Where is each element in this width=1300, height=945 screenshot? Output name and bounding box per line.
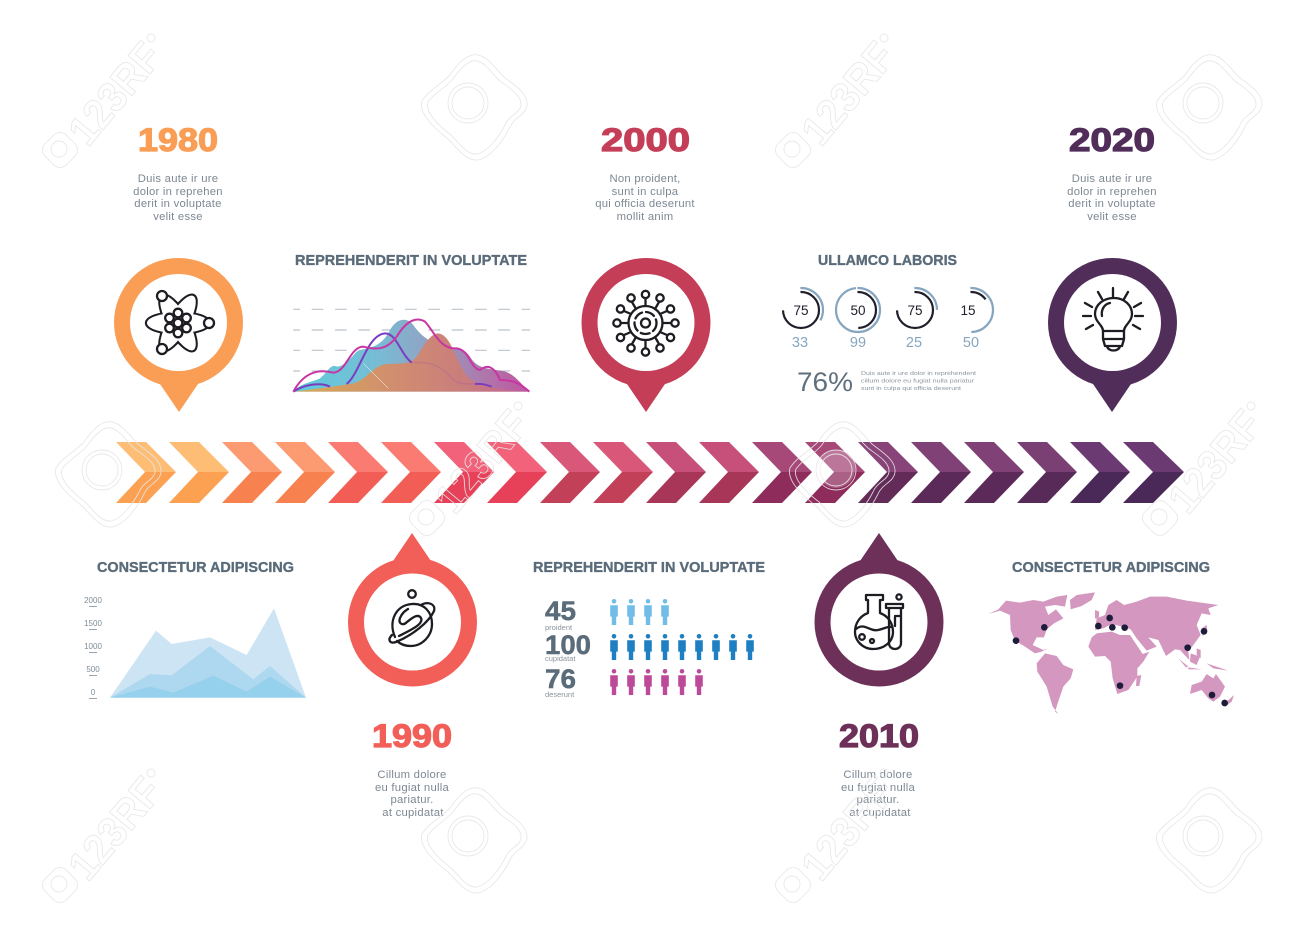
map pin 2000 with virus icon [582,258,710,412]
year 1980 heading: 1980 [138,122,218,158]
watermark 123RF marks: 123RF [1159,401,1271,522]
progress ring 15 / 50: 50 [963,335,979,351]
y axis labels [84,596,102,698]
text block 2000 [595,173,695,223]
text block 2010: Cillum dolore [843,769,913,781]
progress ring 75 / 25: 25 [906,335,922,351]
y axis labels: 500 [86,665,100,674]
people stat 76 deserunt: 76 [545,664,576,694]
progress ring 75 / 25: 75 [907,303,923,318]
progress ring 75 / 25 [893,288,937,351]
watermark 123RF marks: 123RF [426,401,538,522]
layered area and line chart [293,309,530,392]
stat description: sunt in culpa qui officia deserunt [861,386,961,392]
progress ring 75 / 33 [779,288,823,351]
chevron timeline arrow [116,442,1184,503]
watermark 123RF marks: 123RF [59,33,171,154]
text block 1990 [375,769,450,819]
year 2010 heading: 2010 [839,718,919,754]
text block 2020: velit esse [1087,211,1137,223]
text block 2000: Non proident, [609,173,681,185]
y axis labels: 2000 [84,596,102,605]
progress ring 15 / 50 [949,288,993,351]
people stat 100 cupidatat [545,630,754,663]
heading: reprehenderit top: REPREHENDERIT IN VOLUPTATE [295,253,527,269]
people stat 45 proident: 45 [545,596,576,626]
map pin 1980 with atom icon [114,258,243,412]
text block 2000: sunt in culpa [612,186,679,198]
stat 76 percent: 76% [797,367,853,397]
y axis labels: 0 [91,688,96,697]
people stat 76 deserunt [545,664,703,699]
map pin 2010 with chemistry flask icon [814,533,944,686]
text block 2010: pariatur. [856,794,900,806]
text block 1990: Cillum dolore [377,769,447,781]
y axis labels: 1000 [84,642,102,651]
world map with city dots [988,592,1234,714]
people stat 76 deserunt: deserunt [545,690,575,699]
text block 2020: dolor in reprehen [1067,186,1157,198]
people stat 100 cupidatat: 100 [545,630,591,660]
heading: consectetur right: CONSECTETUR ADIPISCING [1012,560,1210,576]
text block 1990: eu fugiat nulla [375,782,450,794]
text block 2010 [841,769,916,819]
map pin 1990 with planet icon [348,533,477,686]
people stat 45 proident [545,596,669,632]
text block 1980: dolor in reprehen [133,186,223,198]
watermark 123RF marks: 123RF [792,33,904,154]
text block 1980: derit in voluptate [134,198,222,210]
text block 1990: pariatur. [390,794,434,806]
map pin 2020 with light bulb icon [1048,258,1177,412]
text block 1990: at cupidatat [382,807,444,819]
text block 2010: eu fugiat nulla [841,782,916,794]
watermark highlight disc [817,450,855,488]
stat description: Duis aute ir ure dolor in reprehendent [861,371,976,377]
progress ring 15 / 50: 15 [960,303,976,318]
y axis labels: 1500 [84,619,102,628]
text block 2000: mollit anim [617,211,673,223]
heading: consectetur left: CONSECTETUR ADIPISCING [97,560,294,576]
stat description: cillum dolore eu fugiat nulla pariatur [861,378,974,384]
progress ring 50 / 99: 99 [850,335,866,351]
stat description [861,371,976,392]
text block 1980: Duis aute ir ure [138,173,218,185]
year 1990 heading: 1990 [372,718,452,754]
heading: reprehenderit bottom: REPREHENDERIT IN VOLUPTATE [533,560,765,576]
text block 2010: at cupidatat [849,807,911,819]
text block 1980 [133,173,223,223]
text block 2020 [1067,173,1157,223]
year 2000 heading: 2000 [601,122,690,158]
progress ring 75 / 33: 33 [792,335,808,351]
people stat 45 proident: proident [545,623,573,632]
blue layered area chart [110,608,306,698]
progress ring 75 / 33: 75 [793,303,809,318]
text block 2000: qui officia deserunt [595,198,695,210]
people stat 100 cupidatat: cupidatat [545,654,576,663]
progress ring 50 / 99 [836,288,880,351]
watermark 123RF marks: 123RF [59,768,171,889]
text block 2020: derit in voluptate [1068,198,1156,210]
text block 2020: Duis aute ir ure [1072,173,1152,185]
heading: ullamco laboris: ULLAMCO LABORIS [818,253,957,269]
year 2020 heading: 2020 [1069,122,1155,158]
watermark 123RF marks: 123RF [792,768,904,889]
text block 1980: velit esse [153,211,203,223]
progress ring 50 / 99: 50 [850,303,866,318]
